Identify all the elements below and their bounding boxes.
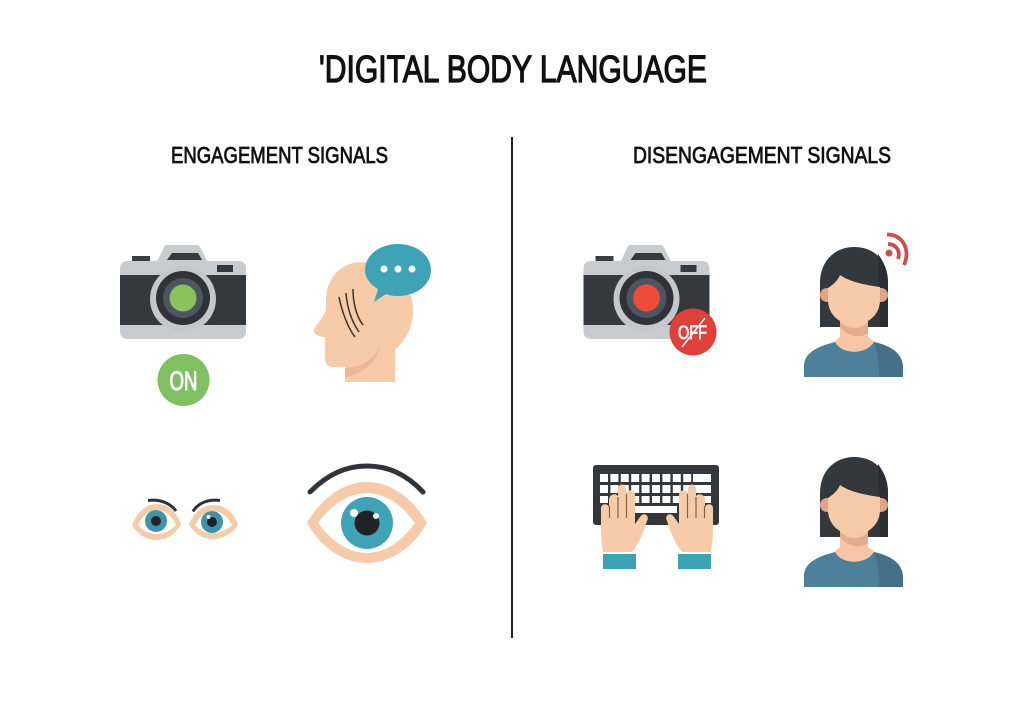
icon: head with speech bubble <box>314 244 431 382</box>
heading: disengagement signals: DISENGAGEMENT SIGNALS <box>633 142 891 168</box>
icon: camera off <box>584 245 710 339</box>
icon: pair of small eyes <box>132 500 238 540</box>
icon: OFF badge <box>670 308 716 356</box>
icon: person <box>804 457 903 587</box>
title: 'DIGITAL BODY LANGUAGE <box>319 49 707 91</box>
heading: engagement signals: ENGAGEMENT SIGNALS <box>171 142 388 168</box>
icon: camera on <box>120 245 246 339</box>
icon: hands on keyboard <box>593 465 719 569</box>
center divider <box>511 137 513 638</box>
icon: ON badge: ON <box>170 366 198 396</box>
icon: OFF badge: OFF <box>678 323 707 344</box>
icon: person with wifi signal <box>804 234 906 377</box>
icon: large eye <box>307 466 427 563</box>
icon: ON badge <box>158 354 210 406</box>
